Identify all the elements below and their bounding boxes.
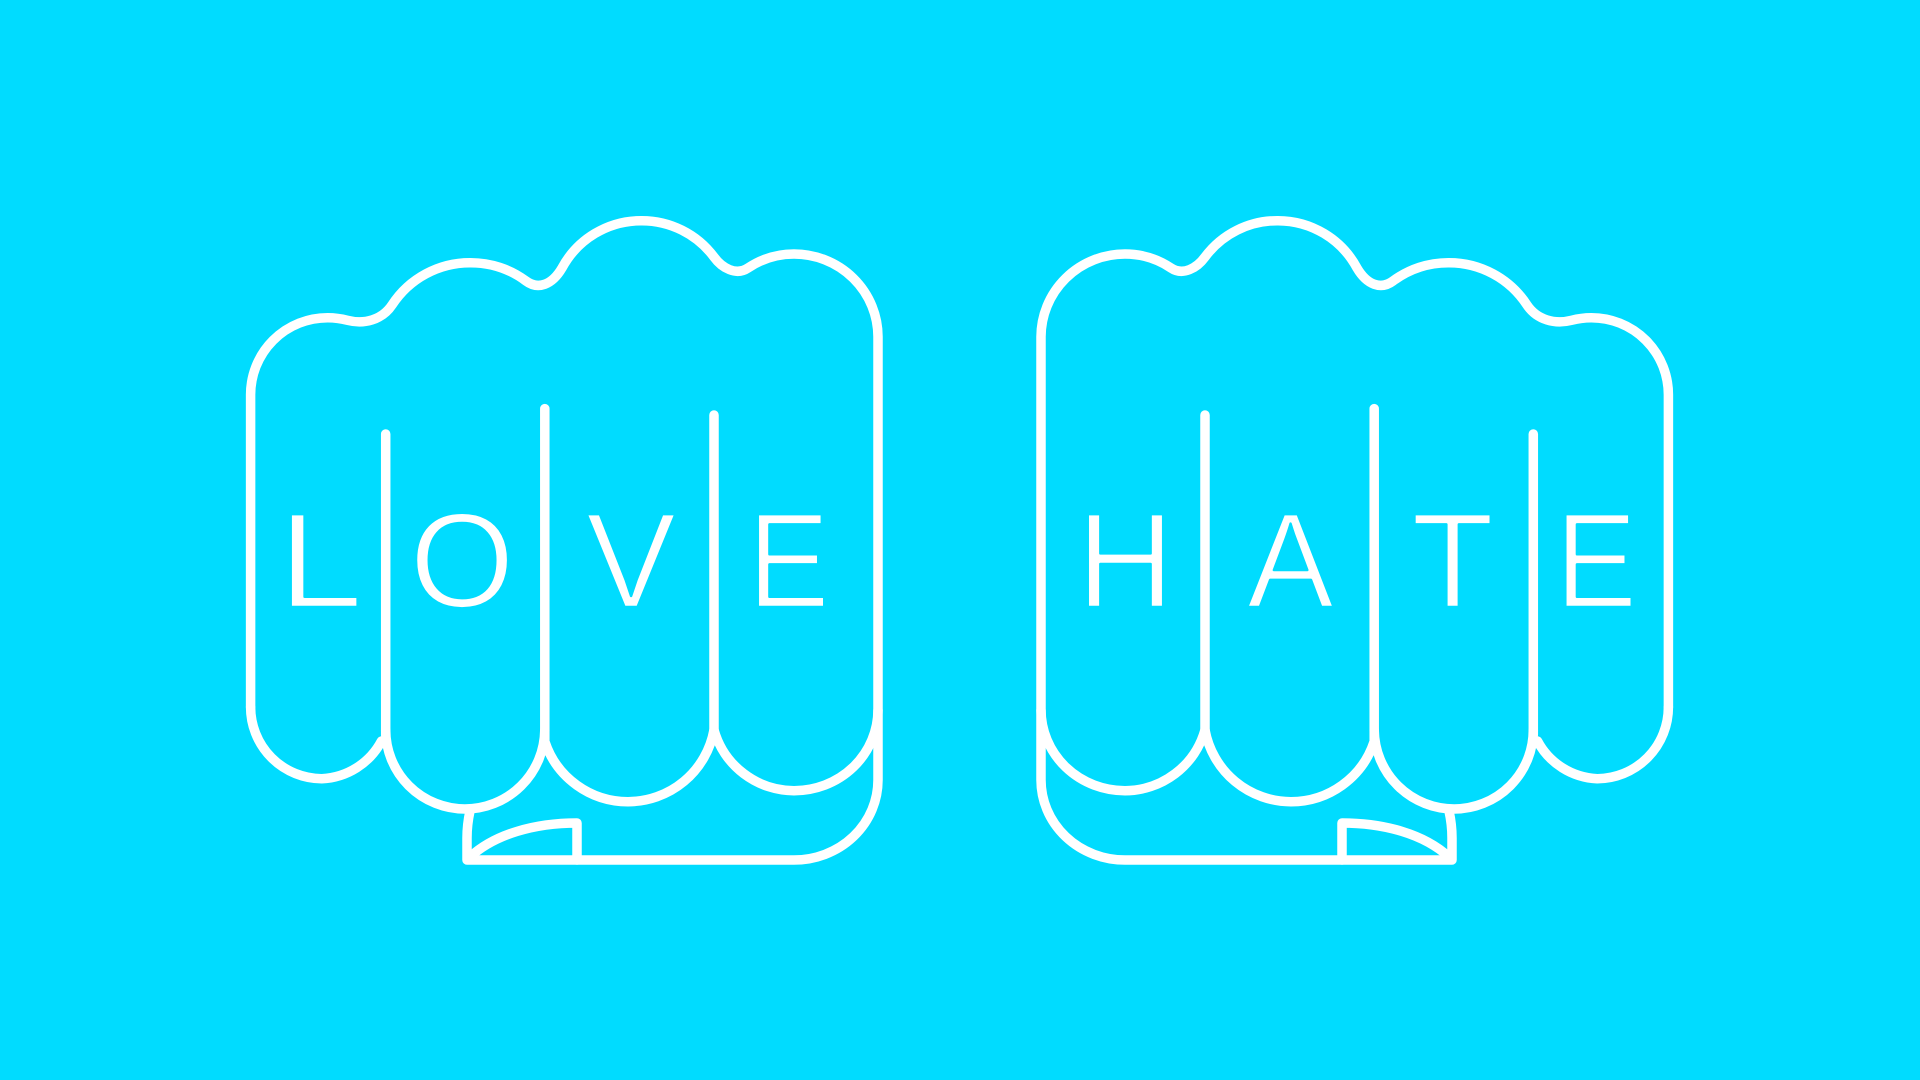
- word: LOVE: L: [278, 485, 363, 636]
- word: HATE: H: [1077, 485, 1174, 636]
- right fist outline: [1041, 221, 1668, 860]
- knuckles and outer edge: [251, 221, 878, 860]
- knuckles and outer edge: [1041, 221, 1668, 860]
- word: HATE: T: [1411, 485, 1494, 636]
- word: LOVE: V: [586, 485, 676, 636]
- word: HATE: A: [1247, 486, 1334, 637]
- left fist: LOVE: [251, 221, 878, 860]
- word: LOVE: [278, 485, 829, 636]
- finger divider lines: [386, 409, 714, 740]
- finger divider lines: [1205, 409, 1533, 740]
- word: HATE: [1077, 485, 1637, 637]
- thumb: [1342, 823, 1449, 860]
- word: HATE: E: [1555, 485, 1637, 636]
- fingertips: [1041, 707, 1668, 809]
- word: LOVE: O: [410, 485, 515, 636]
- left fist outline: [251, 221, 878, 860]
- fingertips: [251, 707, 878, 809]
- word: LOVE: E: [748, 485, 829, 636]
- right fist: HATE: [1041, 221, 1668, 860]
- thumb: [470, 823, 577, 860]
